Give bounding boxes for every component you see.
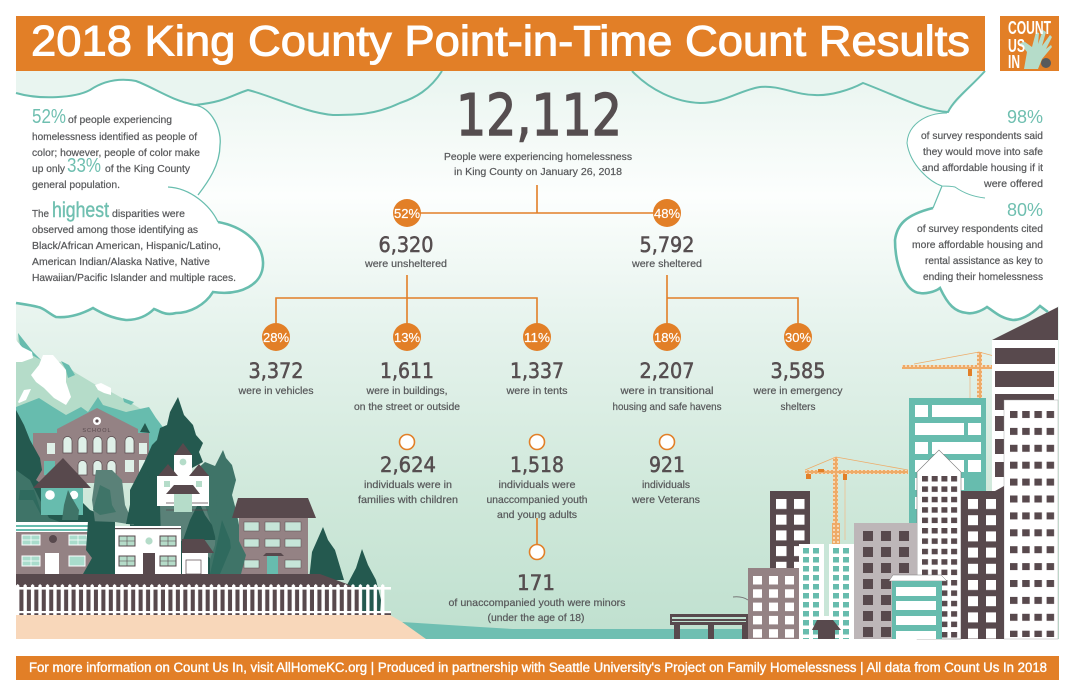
text block: survey results: 98% — [1007, 107, 1043, 127]
scene: dark tower — [961, 486, 1004, 639]
stat: families with children: 2,624 — [380, 453, 436, 478]
scene: white pointed tower — [917, 450, 961, 639]
headline number — [444, 83, 632, 178]
stat: veterans: were Veterans — [631, 494, 700, 506]
stat: families with children — [358, 434, 458, 506]
scene: teal house — [16, 458, 91, 522]
text block: racial disparities: American Indian/Alaska Native, Native — [32, 256, 210, 268]
scene: front white tower — [1004, 400, 1058, 639]
text block: survey results: of survey respondents said — [921, 130, 1043, 142]
stat: buildings, street or outside: on the street or outside — [354, 401, 460, 413]
stat: minors: 171 — [517, 571, 555, 596]
scene: teal office building — [909, 398, 986, 639]
stat: transitional housing: were in transitional — [619, 385, 714, 397]
text block: racial disparities: 52% — [32, 106, 66, 128]
text block: racial disparities: highest — [52, 199, 109, 222]
scene: dark forest — [16, 397, 381, 612]
text block: survey results: they would move into safe — [923, 146, 1043, 158]
text block: racial disparities: of the King County — [105, 163, 191, 175]
scene: tall striped tower — [992, 307, 1058, 639]
stat: sheltered: 48% — [654, 206, 680, 221]
footer banner: For more information on Count Us In, visit AllHomeKC.org | Produced in partnership with Seattle University's Project on Family Homelessness | All data from Count Us In 2018 — [29, 660, 1047, 675]
text block: survey results: and affordable housing if it — [922, 162, 1043, 174]
scene: school — [33, 408, 150, 483]
scene: mountains — [16, 333, 165, 470]
text block: survey results — [912, 107, 1043, 283]
stat: unaccompanied youth — [486, 434, 588, 521]
stat: emergency shelters: 3,585 — [770, 359, 826, 384]
background panel — [16, 71, 1059, 639]
stat: tents: 1,337 — [510, 359, 564, 384]
stat: emergency shelters: were in emergency — [752, 385, 843, 397]
stat: minors: (under the age of 18) — [488, 612, 584, 624]
stat: minors — [448, 544, 626, 624]
text block: survey results: 80% — [1007, 200, 1043, 220]
stat: buildings, street or outside: were in buildings, — [366, 385, 448, 397]
stat: vehicles: 28% — [263, 330, 289, 345]
headline number: 12,112 — [456, 83, 622, 149]
stat: tents: 11% — [524, 330, 550, 345]
text block: survey results: rental assistance as key to — [925, 255, 1043, 267]
scene: white house with garage — [115, 526, 214, 574]
stat: families with children: families with children — [358, 494, 458, 506]
text block: survey results: were offered — [983, 178, 1043, 190]
scene: grey building — [854, 523, 917, 639]
stat: unaccompanied youth: and young adults — [497, 509, 577, 521]
stat: sheltered: were sheltered — [631, 258, 702, 270]
stat: tents: were in tents — [505, 385, 568, 397]
stat: veterans: 921 — [649, 453, 685, 478]
text block: racial disparities: Black/African American, Hispanic/Latino, — [32, 240, 221, 252]
scene: white picket fence — [16, 584, 391, 615]
scene: school: SCHOOL — [82, 428, 112, 434]
stat: unsheltered: 6,320 — [378, 233, 434, 258]
text block: racial disparities: Hawaiian/Pacific Islander and multiple races. — [32, 272, 236, 284]
text block: racial disparities: homelessness identified as people of — [32, 131, 197, 143]
text block: racial disparities: 33% — [67, 155, 101, 177]
text block: racial disparities: observed among those identifying as — [32, 224, 198, 236]
stat: unaccompanied youth: 1,518 — [510, 453, 564, 478]
text block: survey results: ending their homelessness — [923, 271, 1043, 283]
stat: buildings, street or outside — [354, 323, 460, 413]
logo: Count Us In — [1000, 16, 1059, 72]
stat: transitional housing — [612, 323, 722, 413]
stat: sheltered — [631, 199, 702, 270]
stat: veterans: individuals — [642, 479, 690, 491]
text block: racial disparities: of people experiencing — [68, 114, 172, 126]
scene: brown apartment — [220, 498, 316, 574]
stat: transitional housing: 18% — [654, 330, 680, 345]
stat: transitional housing: housing and safe havens — [612, 401, 722, 413]
stat: vehicles: 3,372 — [248, 359, 304, 384]
left cloud — [16, 71, 442, 320]
text block: survey results: of survey respondents cited — [917, 223, 1043, 235]
logo: Count Us In: COUNT — [1008, 18, 1051, 38]
text block: racial disparities: The — [32, 208, 49, 220]
scene: small teal building — [889, 575, 947, 639]
stat: transitional housing: 2,207 — [640, 359, 694, 384]
stat: emergency shelters: shelters — [780, 401, 816, 413]
stat: buildings, street or outside: 1,611 — [380, 359, 434, 384]
scene: dark tree in front — [83, 521, 115, 574]
headline number: in King County on January 26, 2018 — [454, 166, 622, 178]
headline number: People were experiencing homelessness — [444, 151, 632, 163]
scene: grey front block — [748, 568, 799, 639]
stat: unaccompanied youth: individuals were — [498, 479, 576, 491]
text block: survey results: more affordable housing and — [912, 239, 1043, 251]
text block: racial disparities — [32, 106, 236, 284]
stat: veterans — [631, 434, 700, 506]
stat: vehicles: were in vehicles — [237, 385, 314, 397]
stat: unaccompanied youth: unaccompanied youth — [486, 494, 588, 506]
stat: sheltered: 5,792 — [640, 233, 694, 258]
scene: front-left grey building — [16, 522, 93, 574]
text block: racial disparities: color; however, people of color make — [32, 147, 200, 159]
stat: tents — [505, 323, 568, 397]
scene: ground and water — [16, 574, 750, 639]
stat: emergency shelters: 30% — [785, 330, 811, 345]
scene: construction crane right — [902, 352, 994, 402]
stat: minors: of unaccompanied youth were minors — [448, 597, 626, 609]
logo: Count Us In: IN — [1008, 52, 1020, 72]
stat: unsheltered: were unsheltered — [364, 258, 447, 270]
scene: dark block — [770, 491, 810, 581]
stat: buildings, street or outside: 13% — [394, 330, 420, 345]
text block: racial disparities: up only — [32, 163, 66, 175]
footer banner — [16, 656, 1059, 680]
text block: racial disparities: general population. — [32, 179, 120, 191]
stat: emergency shelters — [752, 323, 843, 413]
top cloud band — [16, 71, 985, 115]
connector lines — [276, 185, 798, 545]
stat: unsheltered: 52% — [394, 206, 420, 221]
title banner: 2018 King County Point-in-Time Count Results — [31, 18, 970, 66]
scene: construction crane left — [805, 457, 908, 547]
stat: vehicles — [237, 323, 314, 397]
right cloud — [632, 71, 1059, 320]
scene: pier — [670, 597, 748, 639]
scene: white tower house — [157, 443, 209, 528]
logo: Count Us In: US — [1008, 36, 1025, 56]
scene: white block with teal windows — [799, 544, 854, 639]
stat: families with children: individuals were in — [364, 479, 452, 491]
stat: unsheltered — [364, 199, 447, 270]
text block: racial disparities: disparities were — [112, 208, 185, 220]
